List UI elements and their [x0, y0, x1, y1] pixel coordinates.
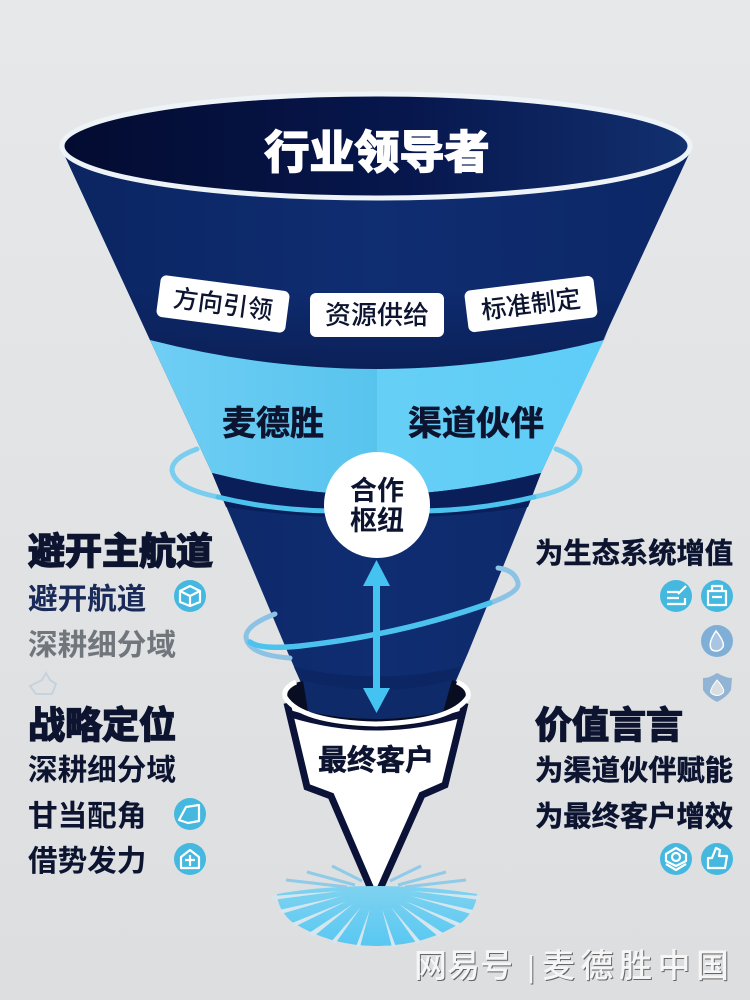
pill: resources: [310, 293, 444, 337]
pill: direction: [156, 275, 290, 333]
label: channel partners: 渠道伙伴: [408, 405, 544, 443]
funnel opening ellipse: [62, 94, 690, 198]
pill: direction: 方向引领: [171, 285, 274, 325]
light rays: [272, 866, 480, 947]
customer funnel white lip: [285, 682, 468, 724]
icon: target layers: [660, 843, 692, 875]
left column: avoid shipping lanes: [28, 531, 213, 662]
lower orbit ring: [246, 568, 518, 658]
left column: strategic positioning: 深耕细分域: [28, 754, 176, 787]
label: McDonald partner left: 麦德胜: [222, 405, 324, 443]
funnel body: [62, 150, 691, 712]
hub circle: 合作: [350, 476, 404, 506]
icon: shield: [703, 673, 732, 702]
left column: strategic positioning: [28, 705, 176, 878]
icon: case: [701, 580, 733, 612]
watermark: [414, 947, 734, 984]
watermark: |: [527, 949, 535, 984]
icon: folder: [174, 798, 206, 830]
small end-customer funnel: [285, 703, 467, 890]
hub circle: 枢纽: [350, 506, 404, 536]
icon: edit: [660, 580, 692, 612]
top navy band: [127, 290, 623, 369]
icon: faded thumb: [30, 673, 56, 694]
left column: avoid shipping lanes: 深耕细分域: [28, 629, 176, 662]
icon: thumbs up: [701, 843, 733, 875]
hub circle: [324, 452, 430, 558]
right column: value statement: [535, 705, 733, 832]
icon: box: [174, 580, 206, 612]
right column: value statement: 为渠道伙伴赋能: [535, 754, 733, 786]
watermark: 网易号: [414, 947, 513, 984]
title: 行业领导者: [264, 127, 490, 178]
customer funnel rim: [284, 680, 469, 728]
icon: drop: [701, 625, 733, 657]
right column: value statement: 为最终客户增效: [535, 800, 733, 832]
pill: standards: 标准制定: [480, 285, 582, 325]
left column: strategic positioning: 甘当配角: [28, 800, 146, 833]
left column: strategic positioning: 借势发力: [28, 845, 146, 878]
pill: standards: [464, 275, 598, 333]
icon: home: [174, 843, 206, 875]
end customer label: 最终客户: [318, 744, 434, 777]
double arrow: [363, 560, 390, 713]
upper orbit ring: [172, 449, 580, 511]
right column: ecosystem value: 为生态系统增值: [535, 537, 733, 569]
left column: avoid shipping lanes: 避开主航道: [28, 531, 213, 572]
left column: avoid shipping lanes: 避开航道: [28, 583, 146, 616]
customer funnel inner navy: [303, 680, 452, 719]
dark band below cyan: [212, 473, 541, 518]
lower funnel shade: [294, 667, 461, 712]
right column: value statement: 价值言言: [535, 705, 683, 746]
left column: strategic positioning: 战略定位: [28, 705, 176, 746]
watermark: 麦德胜中国: [542, 947, 734, 984]
pill: resources: 资源供给: [325, 300, 429, 330]
cyan partner band: [150, 340, 604, 518]
